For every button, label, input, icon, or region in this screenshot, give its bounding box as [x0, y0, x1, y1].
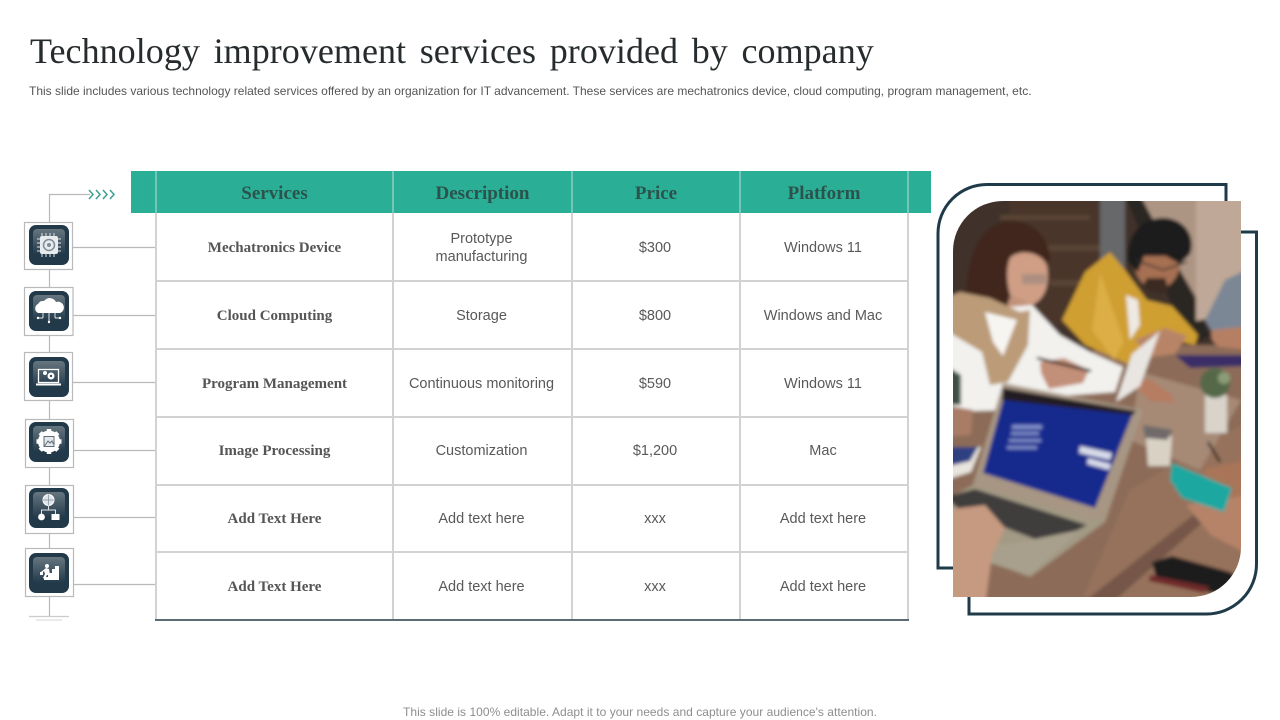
laptop: [973, 383, 1143, 522]
icon: globe network: [29, 488, 69, 528]
photo: team at table with laptops: [945, 195, 1250, 605]
left tablet: [945, 447, 981, 480]
icon: laptop with gears: [29, 357, 69, 397]
services table: Add text here: [438, 578, 525, 594]
services table: Customization: [436, 442, 527, 458]
mug and pencils: [1146, 436, 1172, 466]
woman body: [945, 300, 1123, 412]
footer note: This slide is 100% editable. Adapt it to your needs and capture your audience's attention.: [403, 705, 877, 719]
row: Image Processing: Image Processing: [219, 442, 330, 458]
arm and pen: [1040, 358, 1089, 389]
services table: Platform: [788, 183, 860, 204]
icon: microchip: [29, 225, 69, 265]
man: [1062, 252, 1198, 364]
services table: $1,200: [633, 442, 677, 458]
tablet: [1175, 355, 1250, 368]
services table: manufacturing: [436, 248, 527, 264]
right person: [1203, 270, 1241, 333]
services table: Add text here: [780, 510, 866, 526]
icon: cloud network: [29, 291, 69, 331]
row: Add Text Here 1: Add Text Here: [228, 510, 321, 526]
services table: $590: [639, 376, 671, 392]
services table: Add text here: [438, 510, 525, 526]
phone on desk: [1152, 556, 1241, 594]
services table: Continuous monitoring: [409, 376, 554, 392]
services table: Windows 11: [784, 376, 862, 392]
row: Add Text Here 2: Add Text Here: [228, 578, 321, 594]
services table: Windows and Mac: [764, 308, 882, 324]
services table: Prototype: [450, 230, 513, 246]
hand on keyboard: [953, 502, 1006, 597]
services table: xxx: [644, 578, 666, 594]
services table: [131, 171, 931, 621]
services table: Price: [635, 183, 677, 204]
icon: image processing gear: [29, 422, 69, 462]
services table: Mac: [809, 442, 837, 458]
table header row: [131, 171, 931, 213]
services table: $300: [639, 240, 671, 256]
icon column with connectors: [24, 183, 1258, 620]
photo frame: [938, 184, 1256, 614]
plant: [1205, 395, 1227, 433]
services table: Windows 11: [784, 240, 862, 256]
right hand with teal phone: [1204, 462, 1241, 499]
services table: Services: [241, 183, 308, 204]
table surface: [945, 345, 1250, 605]
services table: Storage: [456, 308, 507, 324]
subtitle: This slide includes various technology related services offered by an organization for IT advancement. These services are mechatronics device, cloud computing, program management, etc.: [29, 84, 1032, 98]
icon: climbing steps: [29, 553, 69, 593]
title: Technology improvement services provided by company: [30, 31, 874, 71]
connector lines: [24, 194, 155, 620]
services table: xxx: [644, 510, 666, 526]
row: Cloud Computing: Cloud Computing: [217, 308, 332, 324]
services table: Description: [436, 183, 529, 204]
chevron arrows: [89, 190, 114, 199]
row: Mechatronics Device: Mechatronics Device: [208, 240, 341, 256]
woman hair and face: [968, 222, 1050, 302]
row: Program Management: Program Management: [202, 376, 347, 392]
services table: Add text here: [780, 578, 866, 594]
services table: $800: [639, 308, 671, 324]
second laptop lid: [1116, 331, 1160, 402]
